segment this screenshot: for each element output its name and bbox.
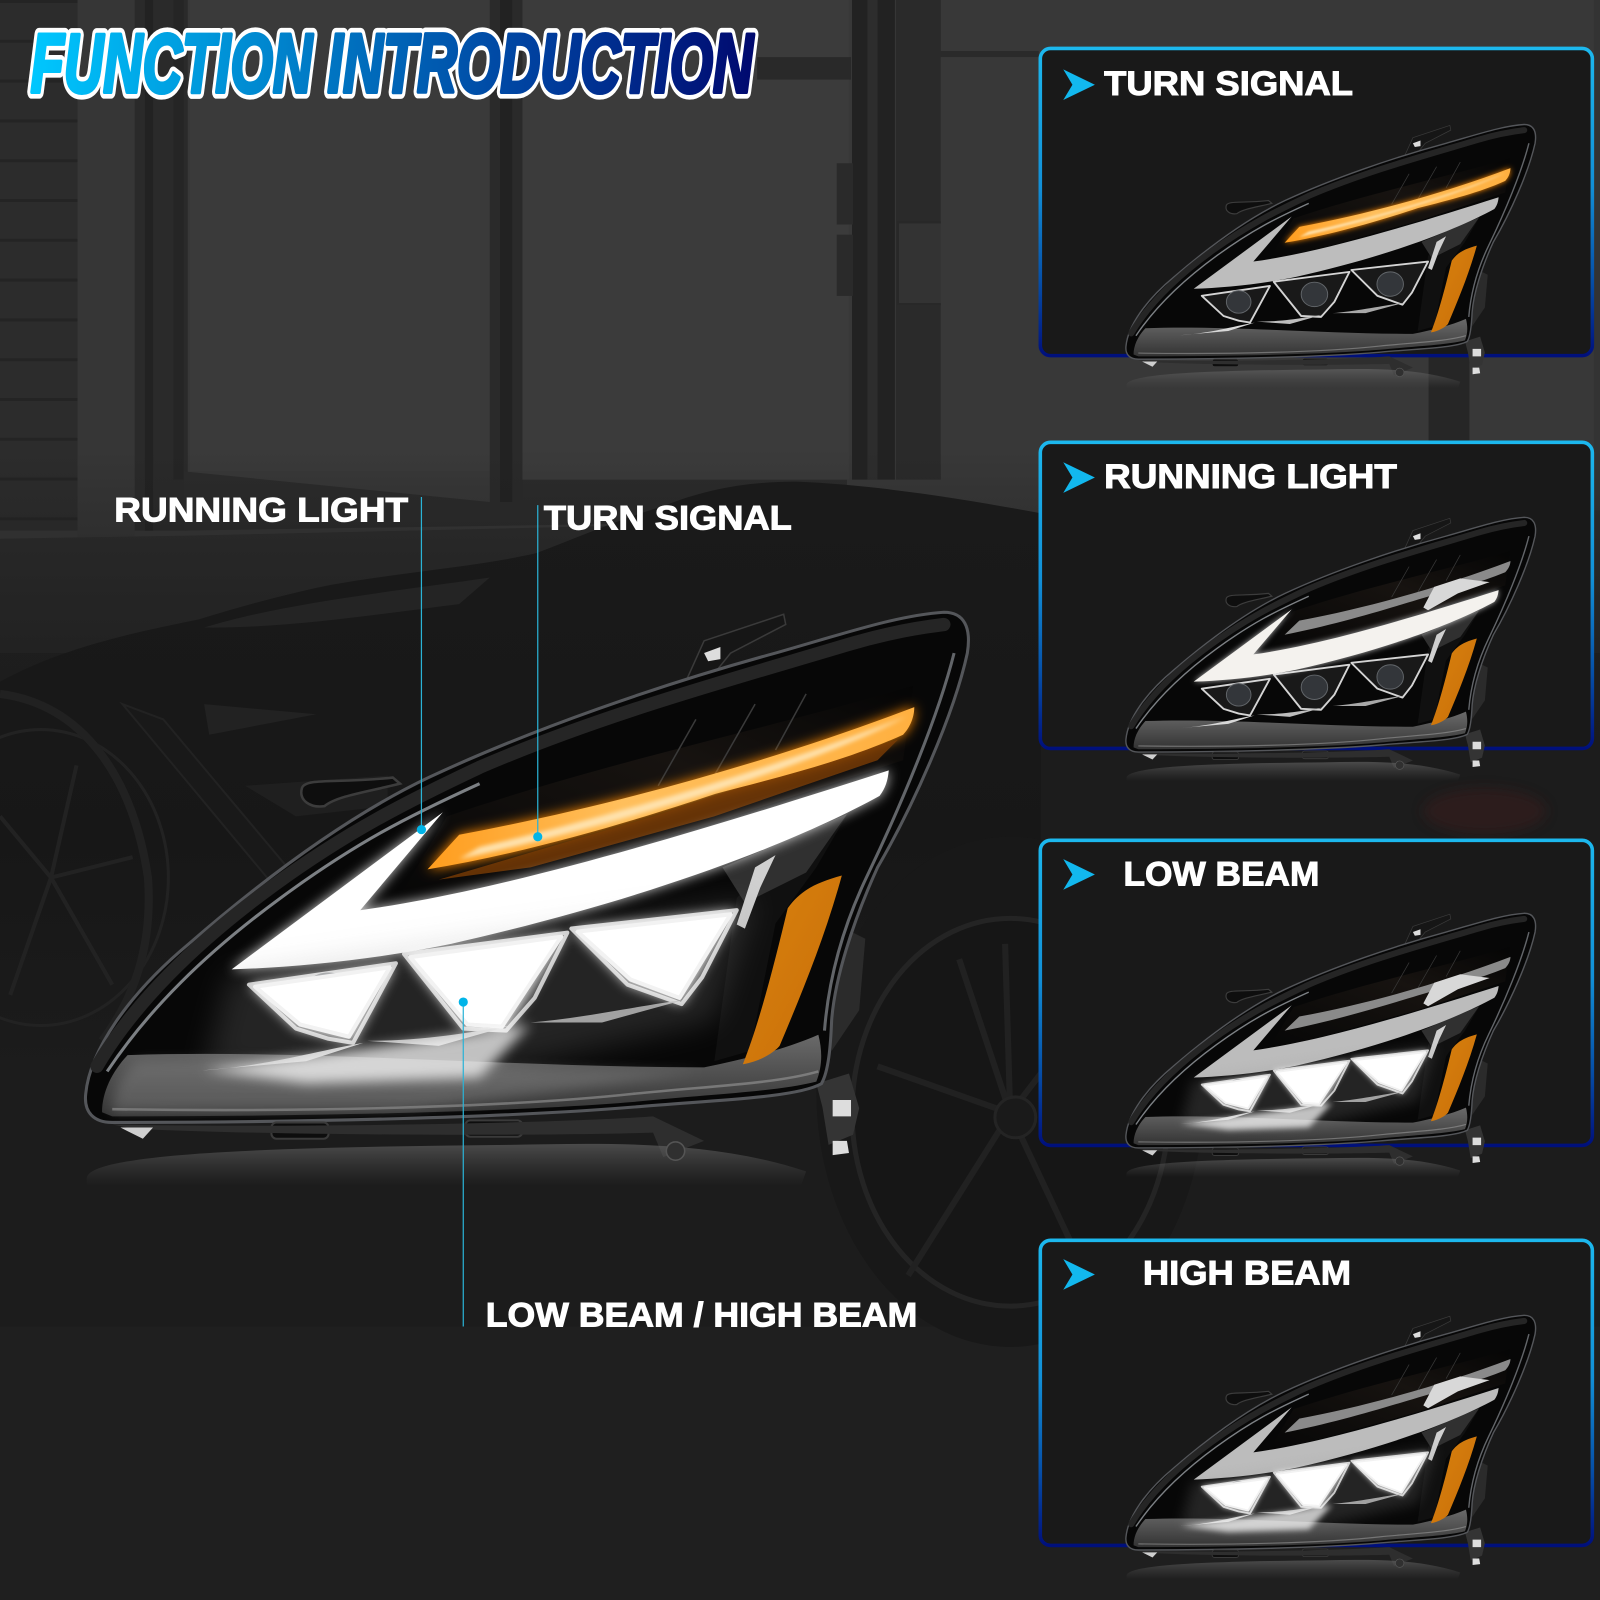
main headlamp — [85, 612, 968, 1186]
panel heading: LOW BEAM — [1123, 856, 1319, 894]
panel: low beam — [1040, 840, 1592, 1177]
panel: high beam — [1040, 1240, 1592, 1579]
leader: running light — [417, 497, 426, 834]
title — [31, 16, 754, 110]
main running light — [232, 770, 889, 969]
icon: arrow — [1063, 859, 1095, 890]
main turn signal glow — [428, 707, 914, 880]
left wheel — [0, 694, 168, 1041]
label: low beam / high beam: LOW BEAM / HIGH BEAM — [486, 1297, 917, 1335]
right wheel — [816, 837, 1204, 1347]
panel heading: TURN SIGNAL — [1104, 65, 1353, 103]
panel: running light — [1040, 442, 1592, 781]
headlamp: low beam lit — [1126, 913, 1536, 1177]
title: FUNCTION — [31, 16, 313, 110]
panel: turn signal — [1040, 48, 1592, 388]
tail light glow — [1423, 789, 1546, 834]
headlamp: turn signal lit — [1126, 124, 1536, 388]
panel heading: HIGH BEAM — [1143, 1255, 1351, 1293]
panel heading: RUNNING LIGHT — [1104, 458, 1397, 496]
label: turn signal: TURN SIGNAL — [544, 500, 792, 538]
icon: arrow — [1063, 69, 1095, 100]
leader: low/high beam — [459, 997, 468, 1327]
title: INTRODUCTION — [328, 16, 754, 110]
main low/high beam — [204, 898, 755, 1084]
title: INTRODUCTION — [328, 16, 754, 110]
icon: arrow — [1063, 1259, 1095, 1290]
headlamp: high beam lit — [1126, 1315, 1536, 1579]
icon: arrow — [1063, 462, 1095, 493]
headlamp: running light lit — [1126, 517, 1536, 781]
car body silhouette — [0, 482, 1041, 1082]
label: running light: RUNNING LIGHT — [114, 491, 408, 529]
leader: turn signal — [533, 505, 542, 841]
title: FUNCTION — [31, 16, 313, 110]
